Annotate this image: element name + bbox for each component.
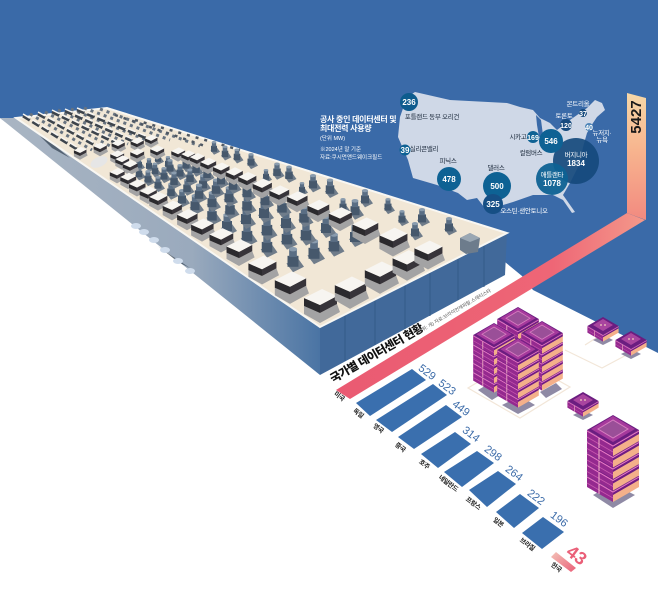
bubble: Chicago: 169 — [527, 135, 539, 142]
photo: data center building rooftop — [0, 108, 507, 375]
values: 449 — [450, 398, 472, 419]
map labels: 피닉스 — [439, 156, 457, 165]
bubble: Phoenix: 478 — [442, 175, 456, 184]
rooftop AC units — [74, 135, 445, 323]
map labels: 컬럼버스 — [520, 148, 543, 157]
bubble: Atlanta: 애틀랜타 — [541, 170, 564, 179]
values: 264 — [503, 463, 525, 484]
map labels: 댈러스 — [487, 163, 505, 172]
lake notch — [536, 115, 543, 137]
heading: data centers under construction — [320, 114, 396, 161]
bubble: Austin: 325 — [486, 200, 500, 209]
values: 314 — [460, 424, 482, 445]
heading: data centers under construction: 최대전력 사용량 — [320, 123, 372, 133]
bubble: Toronto — [560, 119, 572, 131]
Korea bar — [551, 552, 576, 572]
values: 529 — [416, 362, 438, 383]
bubble: Atlanta: 1078 — [543, 179, 561, 188]
bubble: Toronto: 120 — [560, 123, 572, 130]
country labels: 프랑스 — [464, 494, 483, 512]
map labels: 포틀랜드 동부 오리건 — [405, 112, 459, 121]
bubble: Silicon Valley: 39 — [401, 146, 410, 155]
map outline — [398, 92, 605, 213]
diagonal pink bar — [336, 213, 645, 399]
white dome — [89, 154, 109, 170]
bubble: Portland — [400, 93, 418, 111]
map labels: 실리콘밸리 — [410, 144, 439, 153]
far rows of small rooftop units — [23, 108, 240, 151]
heading: data centers under construction: 자료:쿠시먼앤드웨이크필드 — [320, 153, 382, 161]
bubble: Columbus — [539, 129, 563, 153]
roof — [16, 108, 507, 327]
country labels: 브라질 — [518, 535, 537, 553]
bubble: Montreal: 37 — [579, 111, 587, 118]
bar chart: data centers per country — [332, 362, 591, 574]
bubble: Silicon Valley — [400, 144, 410, 156]
bubble: Virginia: 1834 — [567, 159, 585, 168]
country labels: 한국 — [549, 560, 564, 574]
country labels: 중국 — [393, 441, 407, 454]
bubble: Dallas: 500 — [490, 182, 504, 191]
US map — [398, 92, 612, 215]
bubble: Virginia — [553, 138, 599, 184]
country labels: 미국 — [332, 389, 347, 403]
values: 523 — [436, 377, 458, 398]
vertical bar — [627, 93, 646, 220]
heading: data centers under construction: 공사 중인 데이터센터 및 — [320, 114, 396, 124]
bubble: Portland: 236 — [402, 98, 416, 107]
values: 196 — [548, 509, 570, 530]
bubble: Chicago — [527, 131, 539, 143]
map labels — [405, 99, 612, 215]
bubble: Atlanta — [536, 163, 568, 195]
chart title: 국가별 데이터센터 현황 — [328, 320, 426, 386]
chart title — [328, 282, 493, 386]
map labels: 몬트리올 — [567, 99, 590, 108]
5427 total bar with bend — [336, 93, 646, 399]
chart title: (단위: 개) 자료:브라이언캐피탈,스태티스타 — [415, 287, 493, 336]
country labels: 영국 — [371, 421, 386, 435]
bubble: Dallas — [483, 172, 511, 200]
small server: middle — [567, 392, 599, 420]
heading: data centers under construction: ※2024년 말 기준 — [320, 145, 361, 153]
map labels: 토론토 — [555, 112, 573, 120]
map labels: 뉴저지· — [593, 128, 612, 137]
map labels: 뉴욕 — [596, 136, 608, 144]
map labels: 오스틴·샌안토니오 — [500, 206, 548, 215]
map labels: 시카고 — [509, 132, 527, 141]
values: 222 — [525, 487, 547, 508]
small server: top — [587, 317, 619, 345]
heading: data centers under construction: (단위 MW) — [320, 134, 345, 142]
bubble: Phoenix — [437, 167, 461, 191]
left wall — [0, 118, 320, 375]
bubble: Virginia: 버지니아 — [565, 150, 588, 159]
right wall — [320, 233, 507, 375]
country labels: 독일 — [351, 406, 366, 420]
country labels: 네덜란드 — [437, 473, 460, 494]
values: 43 — [563, 541, 591, 569]
bubble: Austin — [483, 194, 503, 214]
small server: right — [615, 331, 647, 359]
connector lines — [468, 338, 632, 418]
country labels: 호주 — [417, 458, 431, 471]
country labels — [332, 389, 564, 574]
value 5427: 5427 — [628, 100, 645, 134]
bubble: New Jersey: 40 — [585, 125, 593, 132]
server cluster — [473, 307, 563, 414]
bubble: Columbus: 546 — [544, 137, 558, 146]
rooftop grey box — [460, 233, 480, 254]
values: 298 — [482, 443, 504, 464]
bars — [356, 369, 564, 549]
country labels: 일본 — [491, 515, 506, 529]
server tower — [587, 415, 639, 508]
values — [416, 362, 591, 569]
rooftop fans — [135, 141, 457, 272]
